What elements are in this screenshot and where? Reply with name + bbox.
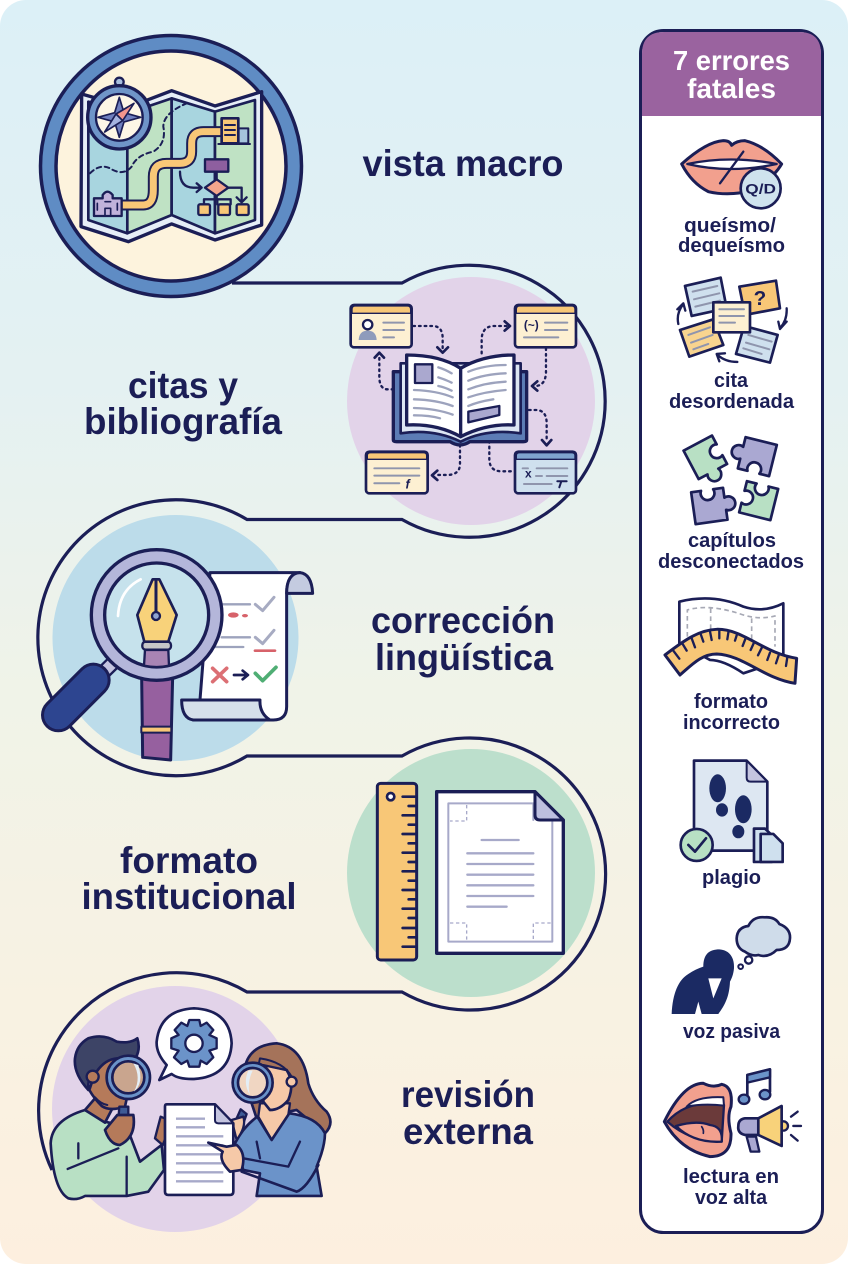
book covers — [393, 372, 527, 445]
card: formula: x — [525, 466, 532, 480]
disc: revisión — [52, 986, 298, 1232]
label: plagio: plagio — [702, 866, 761, 889]
heading: corrección lingüística: lingüística — [375, 637, 553, 678]
icon: lips: Q/D — [745, 181, 776, 197]
icon: thinking silhouette — [672, 917, 790, 1014]
disc: formato — [347, 749, 595, 997]
label: cita desordenada — [669, 369, 795, 413]
connector path — [38, 265, 606, 1170]
heading: vista macro: vista macro — [362, 143, 564, 184]
icon: open mouth, music, megaphone — [664, 1069, 801, 1157]
heading: revisión externa: externa — [403, 1111, 533, 1152]
icon: ruler and document — [377, 783, 563, 960]
icon: wavy paper and ruler — [665, 598, 797, 683]
man — [51, 1036, 173, 1199]
speech bubble — [157, 1008, 232, 1080]
label: capítulos desconectados: desconectados — [658, 550, 804, 573]
card: quote — [515, 305, 576, 347]
panel header — [642, 32, 821, 116]
heading: formato institucional — [82, 840, 296, 917]
dashed arrows — [379, 326, 547, 475]
disc: corrección — [52, 515, 298, 761]
heading: corrección lingüística — [371, 600, 555, 678]
heading: revisión externa — [401, 1074, 535, 1152]
ring — [48, 43, 294, 289]
icon: two reviewers — [51, 1008, 330, 1199]
icon: messy notes: ? — [754, 287, 766, 310]
icon: lips — [682, 141, 782, 208]
magnifier handle — [98, 660, 116, 677]
document — [165, 1104, 243, 1195]
label: queísmo: dequeísmo — [678, 234, 785, 257]
heading: formato institucional: institucional — [82, 876, 296, 917]
card: formula — [515, 452, 576, 493]
icon: document with footprints — [681, 761, 783, 862]
ring outlines — [40, 36, 302, 296]
card: quote: (~) — [524, 318, 539, 332]
document — [437, 792, 563, 953]
ruler — [377, 783, 417, 960]
label: cita desordenada: desordenada — [669, 390, 795, 413]
label: lectura en voz alta: lectura en — [683, 1165, 779, 1188]
label: formato incorrecto — [683, 690, 780, 734]
label: queísmo: queísmo/ — [684, 214, 776, 237]
card: reference: f — [406, 477, 412, 491]
label: formato incorrecto: formato — [694, 690, 768, 713]
heading: citas y bibliografía: bibliografía — [84, 401, 282, 442]
header text — [673, 45, 790, 104]
icon: messy notes — [677, 278, 787, 363]
heading: revisión externa: revisión — [401, 1074, 535, 1115]
woman — [232, 1043, 330, 1196]
header text: fatales — [687, 73, 776, 104]
heading: formato institucional: formato — [120, 840, 258, 881]
icon: magnifier, pen and scroll — [58, 550, 313, 760]
icon: puzzle pieces — [684, 435, 778, 524]
lens — [91, 550, 222, 680]
heading: citas y bibliografía: citas y — [128, 365, 238, 406]
label: queísmo — [678, 214, 785, 257]
card: reference — [366, 452, 428, 493]
label: voz pasiva: voz pasiva — [683, 1020, 781, 1043]
panel: 7 errores fatales — [640, 30, 822, 1232]
panel body — [640, 30, 822, 1232]
label: lectura en voz alta: voz alta — [695, 1186, 768, 1209]
icon: book and cards — [351, 305, 576, 493]
label: capítulos desconectados: capítulos — [688, 529, 776, 552]
pen body — [142, 677, 173, 760]
header text: 7 errores — [673, 45, 790, 76]
label: capítulos desconectados — [658, 529, 804, 573]
heading: citas y bibliografía — [84, 365, 282, 442]
step 1: vista macro — [40, 36, 302, 296]
card: author — [351, 305, 412, 347]
label: lectura en voz alta — [683, 1165, 779, 1209]
label: cita desordenada: cita — [714, 369, 749, 392]
disc: citas — [347, 277, 595, 525]
scroll — [193, 573, 300, 720]
heading: corrección lingüística: corrección — [371, 600, 555, 641]
label: formato incorrecto: incorrecto — [683, 711, 780, 734]
icon: map — [81, 78, 262, 242]
